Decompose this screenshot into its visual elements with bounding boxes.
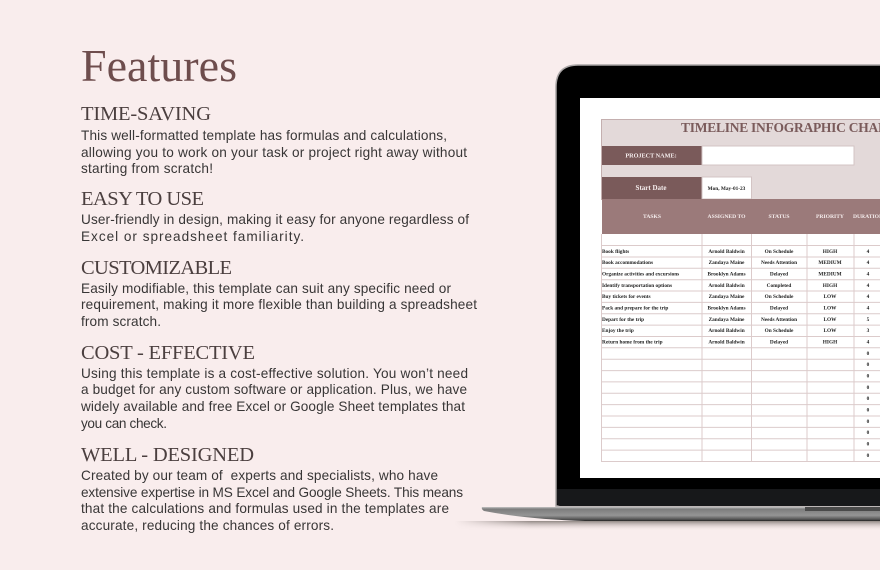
text: well-designed description: accurate, reducing the chances of errors. xyxy=(81,518,334,533)
table rows: HIGH xyxy=(823,283,838,289)
table rows: 0 xyxy=(867,351,870,357)
project name label xyxy=(602,146,702,165)
feature: easy to use xyxy=(81,188,469,244)
text: well-designed description xyxy=(81,468,463,533)
table rows: Arnold Baldwin xyxy=(708,340,745,346)
lower bezel xyxy=(557,489,880,506)
sheet header band xyxy=(602,120,880,200)
table header xyxy=(602,199,880,234)
table rows: Return home from the trip xyxy=(602,340,663,346)
heading: cost-effective: COST - EFFECTIVE xyxy=(81,342,255,364)
text: customizable description: requirement, making it more flexible than building a spreadsheet xyxy=(81,297,477,312)
table rows xyxy=(602,249,870,459)
table rows: HIGH xyxy=(823,249,838,255)
table rows: Arnold Baldwin xyxy=(708,328,745,334)
start date value xyxy=(702,177,752,199)
table rows: Zandaya Maine xyxy=(709,260,745,266)
table rows: 0 xyxy=(867,442,870,448)
table rows: LOW xyxy=(824,328,837,334)
table rows: Depart for the trip xyxy=(602,317,644,323)
table rows: LOW xyxy=(824,306,837,312)
table header: PRIORITY xyxy=(816,214,844,220)
start date label: Start Date xyxy=(636,184,666,192)
feature: time-saving xyxy=(81,103,467,176)
table rows: MEDIUM xyxy=(818,260,842,266)
laptop base xyxy=(482,507,880,521)
screen xyxy=(580,98,880,478)
table rows: Zandaya Maine xyxy=(709,294,745,300)
project name label: PROJECT NAME: xyxy=(625,152,677,160)
table rows: Arnold Baldwin xyxy=(708,249,745,255)
table rows: 4 xyxy=(867,260,870,266)
table rows: 0 xyxy=(867,419,870,425)
text: easy to use description xyxy=(81,212,469,244)
text: cost-effective description: a budget for any custom software or application. Plus, we have xyxy=(81,382,467,397)
heading: well-designed: WELL - DESIGNED xyxy=(81,444,254,466)
text: well-designed description: that the calculations and formulas used in the templates are xyxy=(81,501,449,516)
table rows: 4 xyxy=(867,272,870,278)
table header: STATUS xyxy=(769,214,789,220)
table rows: 4 xyxy=(867,340,870,346)
text: time-saving description xyxy=(81,128,467,176)
project name field xyxy=(702,146,854,165)
feature: well-designed xyxy=(81,444,463,533)
text: well-designed description: Created by our team of experts and specialists, who have xyxy=(81,468,438,483)
table rows: 4 xyxy=(867,283,870,289)
table rows: Organize activities and excursions xyxy=(602,272,679,278)
table rows: Zandaya Maine xyxy=(709,317,745,323)
table rows: LOW xyxy=(824,294,837,300)
text: well-designed description: extensive expertise in MS Excel and Google Sheets. This means xyxy=(81,485,463,500)
table rows: 0 xyxy=(867,362,870,368)
table rows: Completed xyxy=(767,283,791,289)
table rows: Arnold Baldwin xyxy=(708,283,745,289)
heading: customizable: CUSTOMIZABLE xyxy=(81,257,232,279)
text: easy to use description: Excel or spreadsheet familiarity. xyxy=(81,229,304,244)
table rows: On Schedule xyxy=(765,249,794,255)
text: customizable description xyxy=(81,281,477,329)
table rows: Identify transportation options xyxy=(602,283,672,289)
base notch xyxy=(805,507,880,511)
title: Features xyxy=(81,40,237,91)
table rows: 4 xyxy=(867,249,870,255)
text: cost-effective description: widely available and free Excel or Google Sheet templates that xyxy=(80,399,465,414)
table rows: Needs Attention xyxy=(761,260,797,266)
text: cost-effective description: Using this template is a cost-effective solution. You won’t need xyxy=(81,366,468,381)
table header: ASSIGNED TO xyxy=(708,214,746,220)
table rows: Brooklyn Adams xyxy=(707,272,746,278)
text: cost-effective description: you can check. xyxy=(81,416,167,431)
laptop shadow xyxy=(455,521,880,531)
table rows: 4 xyxy=(867,294,870,300)
laptop lid xyxy=(556,65,880,506)
feature: customizable xyxy=(81,257,477,329)
table rows: 0 xyxy=(867,453,870,459)
table rows: Enjoy the trip xyxy=(602,328,634,334)
spreadsheet xyxy=(601,120,880,462)
text: customizable description: from scratch. xyxy=(81,314,161,329)
table grid xyxy=(601,234,880,462)
heading: easy to use: EASY TO USE xyxy=(81,188,204,210)
table rows: On Schedule xyxy=(765,328,794,334)
table rows: 0 xyxy=(867,396,870,402)
table rows: 3 xyxy=(867,328,870,334)
table rows: 4 xyxy=(867,306,870,312)
table rows: LOW xyxy=(824,317,837,323)
table rows: HIGH xyxy=(823,340,838,346)
table rows: Delayed xyxy=(770,340,788,346)
table rows: Delayed xyxy=(770,306,788,312)
table rows: 5 xyxy=(867,317,870,323)
table rows: Needs Attention xyxy=(761,317,797,323)
start date value: Mon, May-01-23 xyxy=(708,186,746,192)
table rows: Book accommodations xyxy=(602,260,653,266)
text: easy to use description: User-friendly in design, making it easy for anyone regardless of xyxy=(81,212,469,227)
table rows: Pack and prepare for the trip xyxy=(602,306,668,312)
text: cost-effective description xyxy=(80,366,468,431)
table rows: 0 xyxy=(867,374,870,380)
table rows: 0 xyxy=(867,430,870,436)
table rows: Delayed xyxy=(770,272,788,278)
table rows: Buy tickets for events xyxy=(602,294,651,300)
table rows: Book flights xyxy=(602,249,629,255)
table rows: On Schedule xyxy=(765,294,794,300)
table rows: Brooklyn Adams xyxy=(707,306,746,312)
laptop mockup xyxy=(455,65,880,531)
table rows: MEDIUM xyxy=(818,272,842,278)
table rows: 0 xyxy=(867,385,870,391)
table header: TASKS xyxy=(643,214,661,220)
feature: cost-effective xyxy=(80,342,468,431)
text: time-saving description: This well-formatted template has formulas and calculations, xyxy=(81,128,447,143)
heading: time-saving: TIME-SAVING xyxy=(81,103,211,125)
text: time-saving description: starting from scratch! xyxy=(81,161,213,176)
text: customizable description: Easily modifiable, this template can suit any specific need or xyxy=(81,281,451,296)
start date label xyxy=(602,177,702,199)
text: time-saving description: allowing you to work on your task or project right away without xyxy=(81,145,467,160)
table rows: 0 xyxy=(867,408,870,414)
